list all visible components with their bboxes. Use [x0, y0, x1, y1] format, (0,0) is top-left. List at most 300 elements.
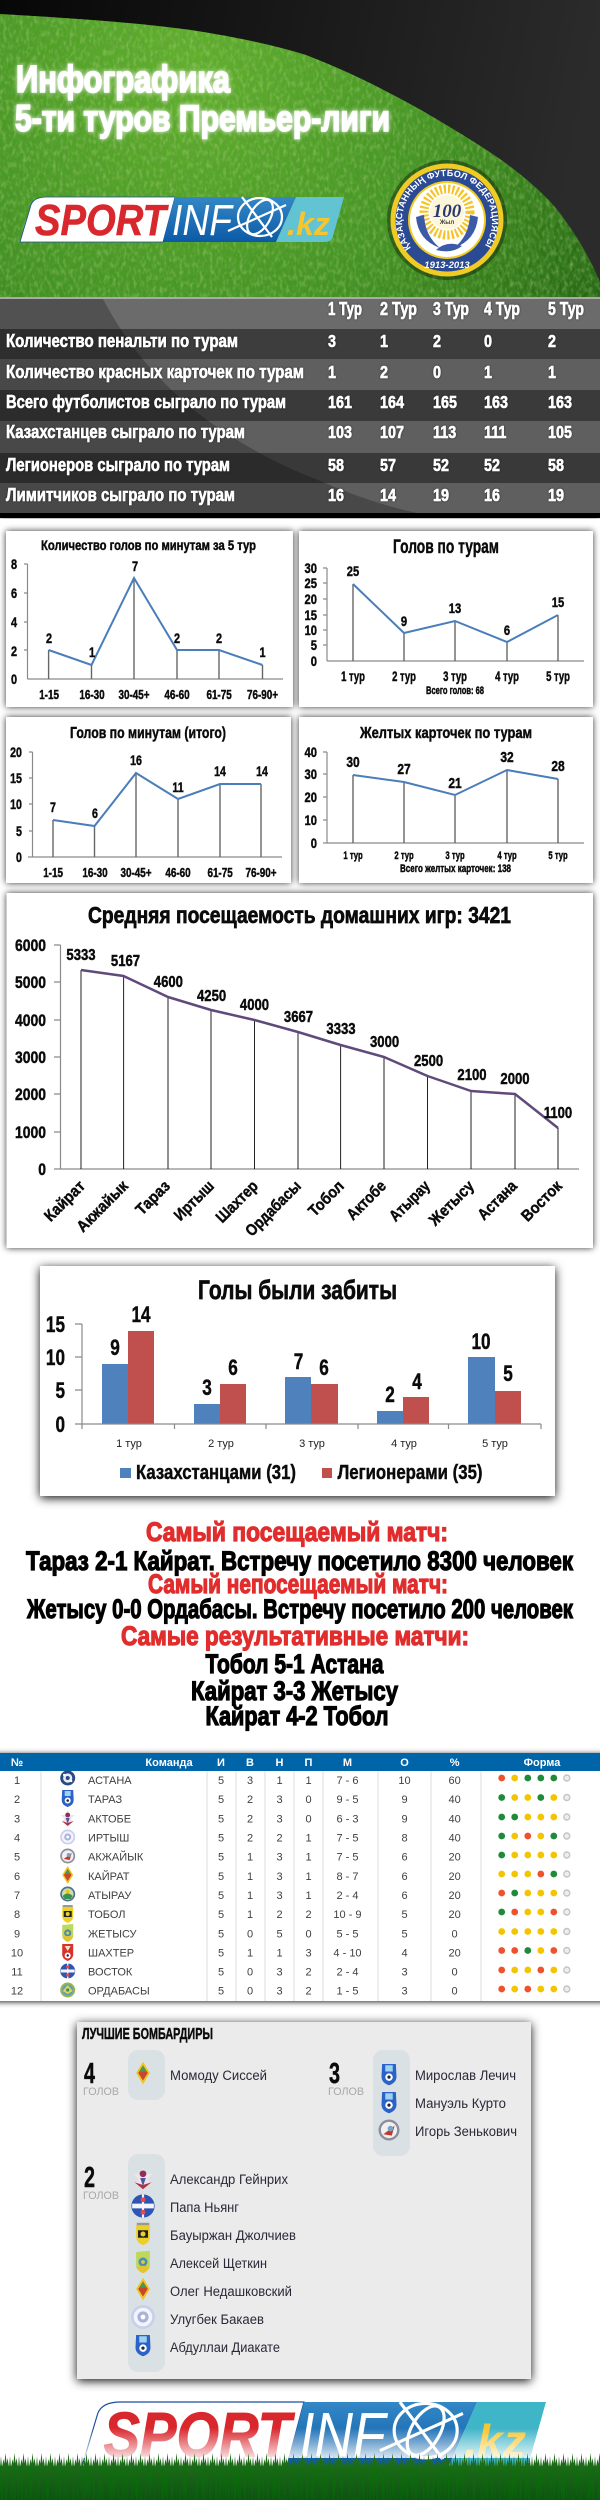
- row: kazakhstani players: [6, 422, 572, 442]
- group: 2 goals: Алексей Щеткин: [170, 2256, 267, 2271]
- row: legionnaires: 52: [484, 456, 500, 475]
- table column headers: 1 Тур: [328, 299, 362, 319]
- standings row 8: 8: [14, 1909, 20, 1921]
- team labels E: Тобол: [305, 1178, 348, 1220]
- standings header: В: [246, 1757, 254, 1769]
- y axis labels E: 2000: [15, 1086, 46, 1104]
- row: penalties: 3: [328, 332, 336, 351]
- standings row 7: 3: [276, 1890, 283, 1902]
- form dots: [498, 1775, 570, 1992]
- chart title C: Голов по минутам (итого): [70, 725, 226, 742]
- row: kazakhstani players: 107: [380, 423, 404, 442]
- y axis labels E: 0: [38, 1161, 46, 1179]
- chart labels B: [305, 561, 570, 697]
- standings row 6: [14, 1866, 461, 1884]
- standings row 9: 0: [247, 1928, 253, 1940]
- standings row 6: 20: [448, 1871, 461, 1883]
- standings row 2: ТАРАЗ: [88, 1794, 123, 1806]
- standings header: %: [450, 1757, 460, 1769]
- chart labels A: 2: [46, 631, 52, 646]
- standings row 3: 40: [448, 1814, 461, 1826]
- round labels F: [116, 1438, 508, 1450]
- panel: top scorers: [77, 2022, 531, 2379]
- chart panel: goals per minute for 5 rounds: [6, 531, 293, 707]
- standings header: М: [343, 1757, 352, 1769]
- chart labels C: 7: [50, 800, 56, 815]
- chart panel: average home attendance: [6, 893, 593, 1248]
- value labels E: 4000: [240, 997, 269, 1014]
- standings row 8: 2: [305, 1909, 312, 1921]
- chart labels C: 5: [16, 824, 22, 839]
- chart labels D: 27: [397, 761, 411, 777]
- row: kazakhstani players: 113: [433, 423, 456, 442]
- group: 2 goals: Олег Недашковский: [170, 2284, 292, 2299]
- value labels F: 14: [131, 1303, 151, 1328]
- chart title D: Желтых карточек по турам: [359, 725, 532, 742]
- standings row 12: 3: [401, 1986, 408, 1998]
- standings row 11: 2: [305, 1966, 312, 1978]
- standings row 9: 5 - 5: [336, 1928, 359, 1940]
- row: legionnaires: [6, 455, 564, 475]
- standings row 6: 6: [14, 1871, 20, 1883]
- round labels F: 1 тур: [116, 1438, 142, 1450]
- y axis labels E: 4000: [15, 1012, 46, 1030]
- standings row 1: АСТАНА: [88, 1775, 132, 1787]
- chart labels D: 28: [551, 758, 565, 774]
- standings row 11: 3: [276, 1966, 283, 1978]
- row: all players: 163: [484, 393, 508, 412]
- chart labels C: 15: [10, 771, 22, 786]
- chart axes F: [75, 1324, 541, 1429]
- row: penalties: Количество пенальти по турам: [6, 331, 238, 351]
- standings row 8: [14, 1905, 461, 1923]
- chart labels D: 40: [305, 745, 317, 760]
- row: kazakhstani players: 105: [548, 423, 572, 442]
- chart labels B: 9: [401, 614, 407, 629]
- standings row 1: 1: [305, 1775, 312, 1787]
- standings row 5: 1: [305, 1852, 312, 1864]
- chart labels B: 2 тур: [392, 668, 416, 685]
- chart labels B: 25: [305, 576, 317, 591]
- standings row 5: 5: [14, 1852, 20, 1864]
- chart labels B: 5: [311, 638, 317, 653]
- text block: notable matches: [26, 1517, 573, 1731]
- value labels E: 5333: [66, 947, 96, 964]
- line series A: [49, 578, 262, 665]
- chart labels D: 30: [346, 754, 360, 770]
- line series B: [353, 584, 558, 642]
- chart labels C: 6: [92, 806, 98, 821]
- team labels E: Атырау: [386, 1178, 434, 1225]
- value labels F: 10: [471, 1330, 491, 1355]
- group: 2 goals: Александр Гейнрих: [170, 2172, 288, 2187]
- title: 5-ти туров Премьер-лиги: [15, 98, 390, 139]
- value labels E: 3333: [326, 1021, 356, 1038]
- logo: Sportinfo.kz header: INF: [172, 196, 234, 245]
- row: penalties: 2: [433, 332, 441, 351]
- row: legionnaires: 58: [328, 456, 344, 475]
- text block: notable matches: Самый посещаемый матч:: [146, 1517, 448, 1547]
- round labels F: 3 тур: [299, 1438, 325, 1450]
- standings row 10: 10: [11, 1948, 23, 1960]
- row: red cards: 2: [380, 363, 388, 382]
- value labels F: 7: [294, 1350, 303, 1375]
- group: 3 goals: 3: [329, 2058, 340, 2090]
- chart labels C: 14: [256, 764, 268, 779]
- standings row 1: 1: [276, 1775, 283, 1787]
- chart labels D: 21: [448, 775, 462, 791]
- chart labels C: 14: [214, 764, 226, 779]
- group: 2 goals: Улугбек Бакаев: [170, 2312, 264, 2327]
- standings row 12: 3: [276, 1986, 283, 1998]
- standings row 10: 4 - 10: [333, 1948, 362, 1960]
- chart labels B: Всего голов: 68: [426, 685, 484, 697]
- standings row 3: 2: [247, 1814, 253, 1826]
- standings row 8: 2: [276, 1909, 283, 1921]
- row: limit players: 16: [484, 486, 500, 505]
- y axis labels E: 3000: [15, 1049, 46, 1067]
- chart labels D: 10: [305, 813, 317, 828]
- row: limit players: 19: [433, 486, 449, 505]
- chart labels C: 16-30: [82, 867, 108, 880]
- value labels F: 6: [319, 1356, 329, 1381]
- chart labels B: 0: [311, 654, 317, 669]
- value labels F: 4: [412, 1370, 422, 1395]
- line series C: [53, 773, 261, 826]
- standings row 4: ИРТЫШ: [88, 1832, 129, 1844]
- table: league standings: [0, 1753, 600, 2001]
- row: all players: [6, 392, 572, 412]
- group: 3 goals: Игорь Зенькович: [415, 2124, 517, 2139]
- standings row 8: ТОБОЛ: [88, 1909, 126, 1921]
- standings row 6: 1: [305, 1871, 312, 1883]
- standings row 7: 1: [247, 1890, 253, 1902]
- standings row 1: 10: [398, 1775, 411, 1787]
- header: grass banner: [0, 0, 600, 298]
- chart labels B: 30: [305, 561, 317, 576]
- standings row 10: ШАХТЕР: [88, 1948, 134, 1960]
- standings header: №: [11, 1757, 23, 1769]
- row: legionnaires: 57: [380, 456, 396, 475]
- standings row 9: ЖЕТЫСУ: [88, 1928, 138, 1940]
- chart labels D: 1 тур: [343, 850, 363, 862]
- chart labels A: 8: [11, 557, 17, 572]
- chart labels B: 5 тур: [546, 668, 570, 685]
- group: 2 goals: Бауыржан Джолчиев: [170, 2228, 296, 2243]
- chart labels B: 6: [504, 623, 510, 638]
- table column headers: 2 Тур: [380, 299, 417, 319]
- y axis labels F: 5: [55, 1379, 65, 1404]
- chart labels C: 1-15: [43, 867, 63, 880]
- standings row 10: 1: [276, 1948, 283, 1960]
- standings row 4: 1: [305, 1832, 312, 1844]
- value labels E: 3667: [284, 1009, 313, 1026]
- group: 2 goals: [83, 2154, 296, 2372]
- chart labels C: 61-75: [207, 867, 233, 880]
- standings row 10: 3: [305, 1948, 312, 1960]
- chart labels A: 2: [216, 631, 222, 646]
- group: 4 goals: 4: [84, 2058, 95, 2090]
- standings row 12: 1 - 5: [336, 1986, 359, 1998]
- team labels E: Шахтер: [213, 1178, 262, 1227]
- chart title E: Средняя посещаемость домашних игр: 3421: [88, 902, 511, 928]
- team labels E: Жетысу: [426, 1178, 478, 1230]
- standings row 2: 5: [218, 1794, 224, 1806]
- group: 3 goals: Мирослав Лечич: [415, 2068, 516, 2083]
- group: 2 goals: Абдуллаи Диакате: [170, 2340, 280, 2355]
- standings row 3: [14, 1810, 461, 1826]
- group: 3 goals: ГОЛОВ: [328, 2086, 364, 2098]
- chart axes and drop lines B: [323, 568, 584, 661]
- standings row 11: 3: [401, 1966, 408, 1978]
- standings header: О: [400, 1757, 409, 1769]
- chart labels C: 16: [130, 753, 142, 768]
- chart axes and drop lines A: [24, 564, 283, 679]
- team labels E: Астана: [475, 1178, 521, 1224]
- team labels E: [41, 1177, 566, 1240]
- standings row 4: 4: [14, 1832, 20, 1844]
- chart labels B: 13: [449, 601, 461, 616]
- text block: notable matches: Самый непосещаемый матч:: [148, 1569, 448, 1599]
- row: red cards: Количество красных карточек по турам: [6, 362, 304, 382]
- standings row 7: АТЫРАУ: [88, 1890, 132, 1902]
- row: red cards: 1: [548, 363, 556, 382]
- value labels F: 9: [110, 1336, 120, 1361]
- standings row 2: 0: [305, 1794, 312, 1806]
- chart title F: Голы были забиты: [198, 1275, 397, 1305]
- standings row 3: 0: [305, 1814, 312, 1826]
- standings row 7: 20: [448, 1890, 461, 1902]
- team labels E: Восток: [518, 1177, 566, 1225]
- standings row 12: 5: [218, 1986, 224, 1998]
- standings row 8: 1: [247, 1909, 253, 1921]
- value labels E: [66, 947, 572, 1122]
- chart labels B: 15: [305, 608, 317, 623]
- row: limit players: 14: [380, 486, 396, 505]
- standings row 2: 40: [448, 1794, 461, 1806]
- standings row 4: 5: [218, 1832, 224, 1844]
- standings row 7: 6: [401, 1890, 408, 1902]
- value labels E: 5167: [111, 953, 140, 970]
- row: all players: 163: [548, 393, 572, 412]
- standings row 4: 2: [276, 1832, 283, 1844]
- footer grass: [0, 2428, 600, 2500]
- standings row 9: [14, 1924, 458, 1942]
- standings row 4: 7 - 5: [336, 1832, 359, 1844]
- chart axes and drop lines C: [28, 752, 282, 857]
- standings row 3: АКТОБЕ: [88, 1814, 131, 1826]
- standings header: Форма: [524, 1757, 561, 1769]
- standings row 9: 5: [276, 1928, 283, 1940]
- standings row 12: [11, 1982, 458, 1998]
- value labels E: 2100: [457, 1067, 487, 1084]
- standings row 9: 5: [218, 1928, 224, 1940]
- y axis labels F: [46, 1313, 65, 1438]
- value labels E: 4600: [154, 974, 183, 991]
- logo: Sportinfo.kz footer: SPORT: [103, 2400, 295, 2470]
- y axis labels E: 1000: [15, 1124, 46, 1142]
- row: penalties: 1: [380, 332, 388, 351]
- standings row 5: 20: [448, 1852, 461, 1864]
- y axis labels E: 5000: [15, 974, 46, 992]
- standings row 2: 9 - 5: [336, 1794, 359, 1806]
- standings row 5: АКЖАЙЫК: [88, 1850, 144, 1864]
- chart labels D: 5 тур: [548, 850, 568, 862]
- scorers heading: ЛУЧШИЕ БОМБАРДИРЫ: [82, 2026, 213, 2043]
- title: Инфографика: [16, 59, 231, 101]
- chart labels B: 20: [305, 592, 317, 607]
- standings row 5: 6: [401, 1852, 408, 1864]
- line series D: [353, 770, 558, 795]
- chart title B: Голов по турам: [393, 537, 499, 558]
- group: 2 goals: ГОЛОВ: [83, 2190, 119, 2202]
- row: legionnaires: 58: [548, 456, 564, 475]
- legend F: Казахстанцами (31): [136, 1462, 296, 1484]
- chart labels D: 4 тур: [497, 850, 517, 862]
- text block: notable matches: Тобол 5-1 Астана: [206, 1649, 384, 1679]
- standings row 1: 60: [448, 1775, 461, 1787]
- standings row 9: 9: [14, 1928, 20, 1940]
- row: kazakhstani players: 111: [484, 423, 506, 442]
- chart labels A: 1-15: [39, 689, 59, 702]
- chart labels A: 16-30: [79, 689, 105, 702]
- chart labels B: 4 тур: [495, 668, 519, 685]
- standings header: И: [217, 1757, 225, 1769]
- standings row 1: 1: [14, 1775, 20, 1787]
- value labels E: 2000: [500, 1071, 530, 1088]
- value labels F: 5: [503, 1362, 513, 1387]
- standings row 9: 0: [305, 1928, 312, 1940]
- row: all players: 161: [328, 393, 352, 412]
- standings row 3: 3: [14, 1814, 20, 1826]
- standings row 12: 12: [11, 1986, 23, 1998]
- standings row 5: 5: [218, 1852, 224, 1864]
- chart labels D: 30: [305, 767, 317, 782]
- row: limit players: [6, 485, 564, 505]
- chart labels C: 10: [10, 797, 22, 812]
- legend F: Легионерами (35): [338, 1462, 482, 1484]
- standings row 6: 1: [247, 1871, 253, 1883]
- chart axes and drop lines D: [323, 752, 584, 843]
- logo: Sportinfo.kz header: [20, 196, 344, 245]
- row: limit players: Лимитчиков сыграло по турам: [6, 485, 235, 505]
- row: kazakhstani players: Казахстанцев сыграло по турам: [6, 422, 245, 442]
- row: legionnaires: Легионеров сыграло по турам: [6, 455, 230, 475]
- text block: notable matches: Кайрат 4-2 Тобол: [206, 1701, 388, 1731]
- group: 2 goals: Папа Ньянг: [170, 2200, 239, 2215]
- standings row 3: 3: [276, 1814, 283, 1826]
- chart labels B: 25: [347, 564, 359, 579]
- badge: football federation 100 years: Жыл: [439, 220, 454, 226]
- standings row 7: [14, 1886, 461, 1902]
- group: 4 goals: ГОЛОВ: [83, 2086, 119, 2098]
- chart labels D: 2 тур: [394, 850, 414, 862]
- standings row 10: 1: [247, 1948, 253, 1960]
- row: kazakhstani players: 103: [328, 423, 352, 442]
- standings row 8: 5: [218, 1909, 224, 1921]
- chart labels A: 2: [174, 631, 180, 646]
- standings row 7: 1: [305, 1890, 312, 1902]
- standings row 2: [14, 1790, 461, 1807]
- chart labels D: 20: [305, 790, 317, 805]
- chart labels D: Всего желтых карточек: 138: [400, 863, 511, 875]
- logo: Sportinfo.kz footer: [82, 2400, 546, 2470]
- standings row 1: [14, 1770, 461, 1787]
- text block: notable matches: Самые результативные матчи:: [121, 1621, 469, 1651]
- standings row 8: 20: [448, 1909, 461, 1921]
- y axis labels E: [15, 937, 46, 1179]
- standings row 5: 3: [276, 1852, 283, 1864]
- table column headers: 3 Тур: [433, 299, 469, 319]
- logo: Sportinfo.kz footer: INF: [300, 2400, 389, 2470]
- chart labels C: 11: [172, 780, 184, 795]
- standings row 4: 8: [401, 1832, 408, 1844]
- chart labels D: 3 тур: [445, 850, 465, 862]
- standings row 6: 6: [401, 1871, 408, 1883]
- team labels E: Тараз: [133, 1178, 174, 1219]
- chart labels A: 2: [11, 644, 17, 659]
- title: [15, 59, 390, 139]
- value labels F: 3: [202, 1376, 212, 1401]
- chart labels A: 1: [89, 645, 95, 660]
- group: 3 goals: Мануэль Курто: [415, 2096, 506, 2111]
- standings row 10: 20: [448, 1948, 461, 1960]
- standings row 5: 7 - 5: [336, 1852, 359, 1864]
- value labels F: [110, 1303, 513, 1408]
- chart labels D: [305, 745, 568, 875]
- chart labels A: 0: [11, 672, 17, 687]
- standings row 12: 0: [247, 1986, 253, 1998]
- team labels E: Кайрат: [41, 1178, 89, 1225]
- badge: football federation 100 years: 100: [433, 201, 462, 222]
- row: legionnaires: 52: [433, 456, 449, 475]
- standings row 3: 5: [218, 1814, 224, 1826]
- badge: football federation 100 years: [387, 160, 507, 280]
- chart labels A: 30-45+: [119, 689, 150, 702]
- chart labels D: 0: [311, 836, 317, 851]
- text block: notable matches: Кайрат 3-3 Жетысу: [191, 1676, 398, 1706]
- chart labels C: 0: [16, 850, 22, 865]
- value labels E: 3000: [370, 1034, 399, 1051]
- chart labels A: [11, 557, 278, 702]
- table: stats per round: [0, 297, 600, 518]
- value labels E: 4250: [197, 988, 226, 1005]
- row: limit players: 16: [328, 486, 344, 505]
- standings row 4: 40: [448, 1832, 461, 1844]
- standings header: [11, 1757, 561, 1769]
- y axis labels F: 0: [55, 1413, 65, 1438]
- group: 4 goals: Момоду Сиссей: [170, 2068, 267, 2083]
- chart labels C: [10, 745, 277, 880]
- value labels F: 2: [385, 1383, 395, 1408]
- chart panel: goals per round: [299, 531, 593, 707]
- chart title A: Количество голов по минутам за 5 тур: [41, 537, 256, 553]
- legend F: [120, 1462, 482, 1484]
- group: 3 goals: [328, 2050, 517, 2156]
- chart labels A: 46-60: [164, 689, 190, 702]
- row: all players: 164: [380, 393, 404, 412]
- standings row 2: 2: [14, 1794, 20, 1806]
- row: all players: 165: [433, 393, 457, 412]
- team labels E: Ордабасы: [243, 1178, 305, 1240]
- chart panel: goals scored by: [40, 1266, 555, 1496]
- standings row 11: 11: [11, 1966, 23, 1978]
- chart labels B: 3 тур: [443, 668, 467, 685]
- standings row 2: 3: [276, 1794, 283, 1806]
- y axis labels F: 15: [46, 1313, 65, 1338]
- badge: football federation 100 years: 1913-2013: [424, 260, 470, 271]
- logo: Sportinfo.kz header: .kz: [287, 206, 330, 242]
